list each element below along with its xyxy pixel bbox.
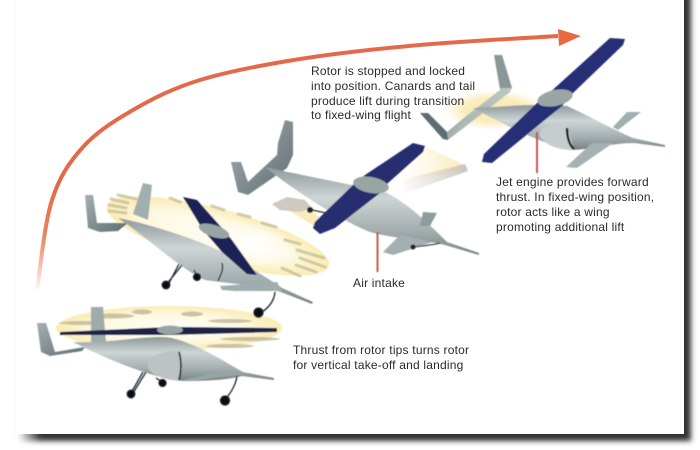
text: jet engine: thrust. In fixed-wing position,: [496, 190, 654, 204]
aircraft: rotor stopped, transition: [231, 120, 479, 272]
text: rotor stopped: Rotor is stopped and locked: [311, 64, 465, 78]
tail fins: [231, 120, 293, 195]
landing gear: [127, 372, 237, 405]
callout line: air intake: [376, 232, 378, 272]
aircraft: fixed-wing flight: [420, 38, 665, 173]
text: rotor stopped: produce lift during transition: [311, 94, 464, 108]
callout line: jet engine: [536, 132, 538, 173]
text: jet engine: promoting additional lift: [496, 220, 625, 234]
tail fins: [37, 307, 106, 356]
main wing: [482, 38, 625, 163]
tail fins: [85, 183, 152, 232]
rotor disc: [100, 180, 336, 292]
flight path arrow: [37, 29, 581, 290]
aircraft: vertical take-off and landing: [37, 306, 282, 405]
text: rotor stopped: to fixed-wing flight: [311, 108, 412, 122]
canards: [383, 212, 440, 255]
text: jet engine: rotor acts like a wing: [496, 205, 610, 219]
canards: [566, 112, 641, 168]
rotor hub: [157, 326, 183, 334]
rotor wash behind wing: [272, 147, 468, 228]
rotor wash: [443, 90, 547, 130]
fuselage: [265, 167, 479, 255]
rotor disc: [56, 306, 282, 350]
rotor hub: [197, 220, 231, 242]
rotor hub: [352, 174, 390, 196]
text: jet engine: Jet engine provides forward: [496, 175, 649, 189]
intake line: [218, 263, 223, 281]
landing gear: [162, 264, 275, 317]
main rotor blade: [60, 327, 277, 335]
canard: [220, 282, 282, 291]
text: air intake: Air intake: [353, 276, 405, 290]
text: rotor stopped: into position. Canards and tail: [311, 79, 475, 93]
main rotor blade: [183, 197, 257, 275]
fuselage: [118, 218, 313, 304]
aircraft: rotor tilted at low speed: [85, 180, 336, 317]
rotor hub: [536, 86, 574, 110]
jet engine: [148, 351, 181, 381]
canard: [182, 371, 243, 381]
fuselage: [473, 105, 665, 150]
text: vertical take-off: Thrust from rotor tips turns rotor: [293, 343, 469, 357]
jet engine: [540, 125, 574, 150]
tail fins: [420, 55, 512, 140]
fuselage: [73, 337, 274, 381]
text: vertical take-off: for vertical take-off and landing: [293, 358, 463, 372]
nose wheel stub: [307, 207, 326, 213]
main wing: [313, 143, 425, 234]
